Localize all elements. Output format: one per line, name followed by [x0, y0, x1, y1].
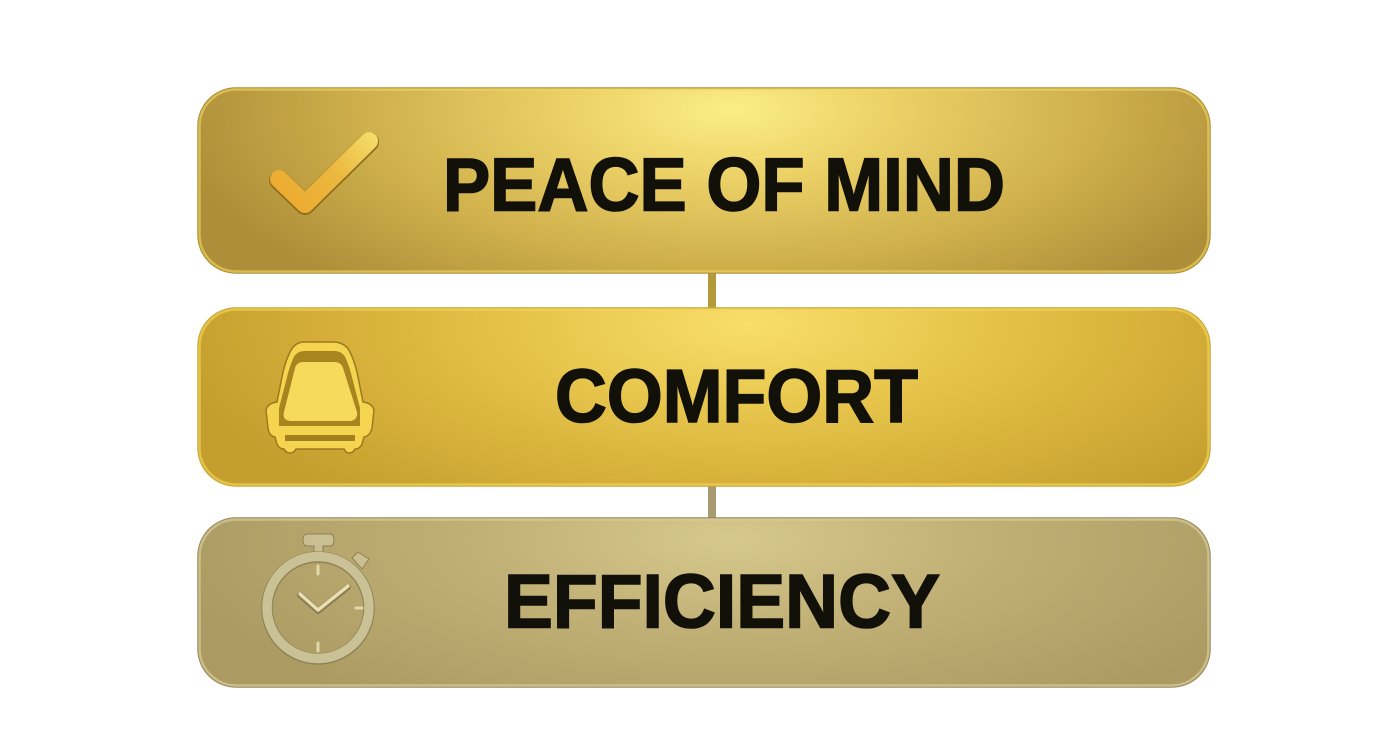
heading: comfort: COMFORT [555, 354, 918, 438]
panel: comfort [198, 308, 1210, 486]
heading: efficiency: EFFICIENCY [504, 560, 940, 644]
heading: peace of mind: PEACE OF MIND [443, 142, 1005, 226]
connector: comfort to efficiency [708, 485, 716, 519]
icon: stopwatch [267, 534, 369, 659]
connector: peace of mind to comfort [708, 272, 716, 309]
icon: seat [266, 342, 374, 453]
panel: efficiency [198, 518, 1210, 687]
panel: peace of mind [198, 88, 1210, 273]
icon: check mark [279, 141, 369, 205]
